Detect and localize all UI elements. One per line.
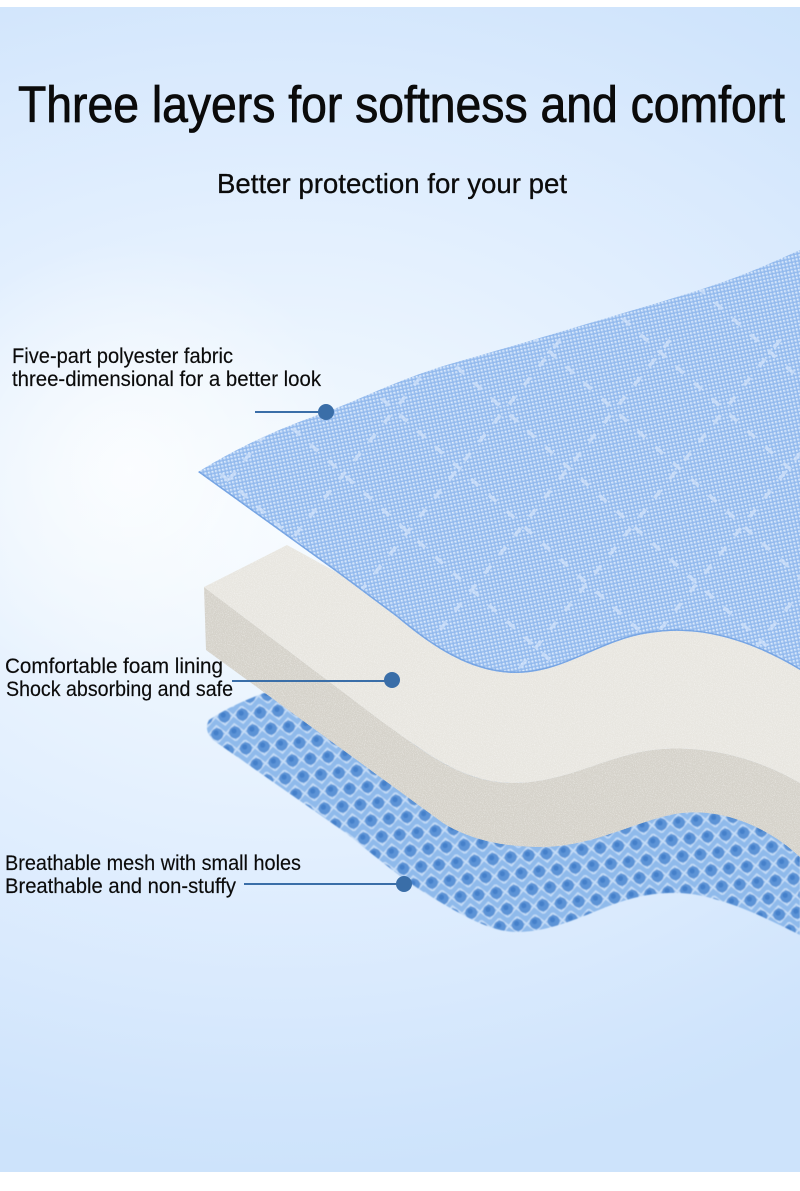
callout text: Breathable mesh with small holes bbox=[5, 852, 301, 875]
fabric weave surface bbox=[190, 240, 800, 680]
leader line bbox=[244, 883, 404, 885]
callout text: Breathable and non-stuffy bbox=[5, 875, 236, 898]
layer: foam lining bbox=[204, 545, 800, 857]
fabric hem shadow bbox=[198, 472, 800, 673]
marker dot bbox=[396, 876, 412, 892]
fabric grid stitching bbox=[209, 289, 800, 668]
layer: breathable mesh bbox=[207, 693, 800, 935]
subtitle: Better protection for your pet bbox=[217, 168, 567, 199]
foam speckle texture bbox=[204, 545, 800, 857]
marker dot bbox=[318, 404, 334, 420]
layer: polyester fabric bbox=[198, 250, 800, 673]
leader line bbox=[255, 411, 326, 413]
callout text: three-dimensional for a better look bbox=[12, 368, 321, 391]
leader line bbox=[232, 680, 392, 682]
callout: polyester fabric bbox=[12, 345, 334, 420]
foam side face bbox=[204, 587, 800, 857]
marker dot bbox=[384, 672, 400, 688]
callout text: Shock absorbing and safe bbox=[6, 678, 233, 701]
callout text: Five-part polyester fabric bbox=[12, 345, 233, 368]
callout: breathable mesh bbox=[5, 852, 412, 898]
foam top face bbox=[204, 545, 800, 783]
callout text: Comfortable foam lining bbox=[5, 655, 223, 678]
callout: foam lining bbox=[5, 655, 400, 701]
background glow bbox=[0, 200, 400, 760]
